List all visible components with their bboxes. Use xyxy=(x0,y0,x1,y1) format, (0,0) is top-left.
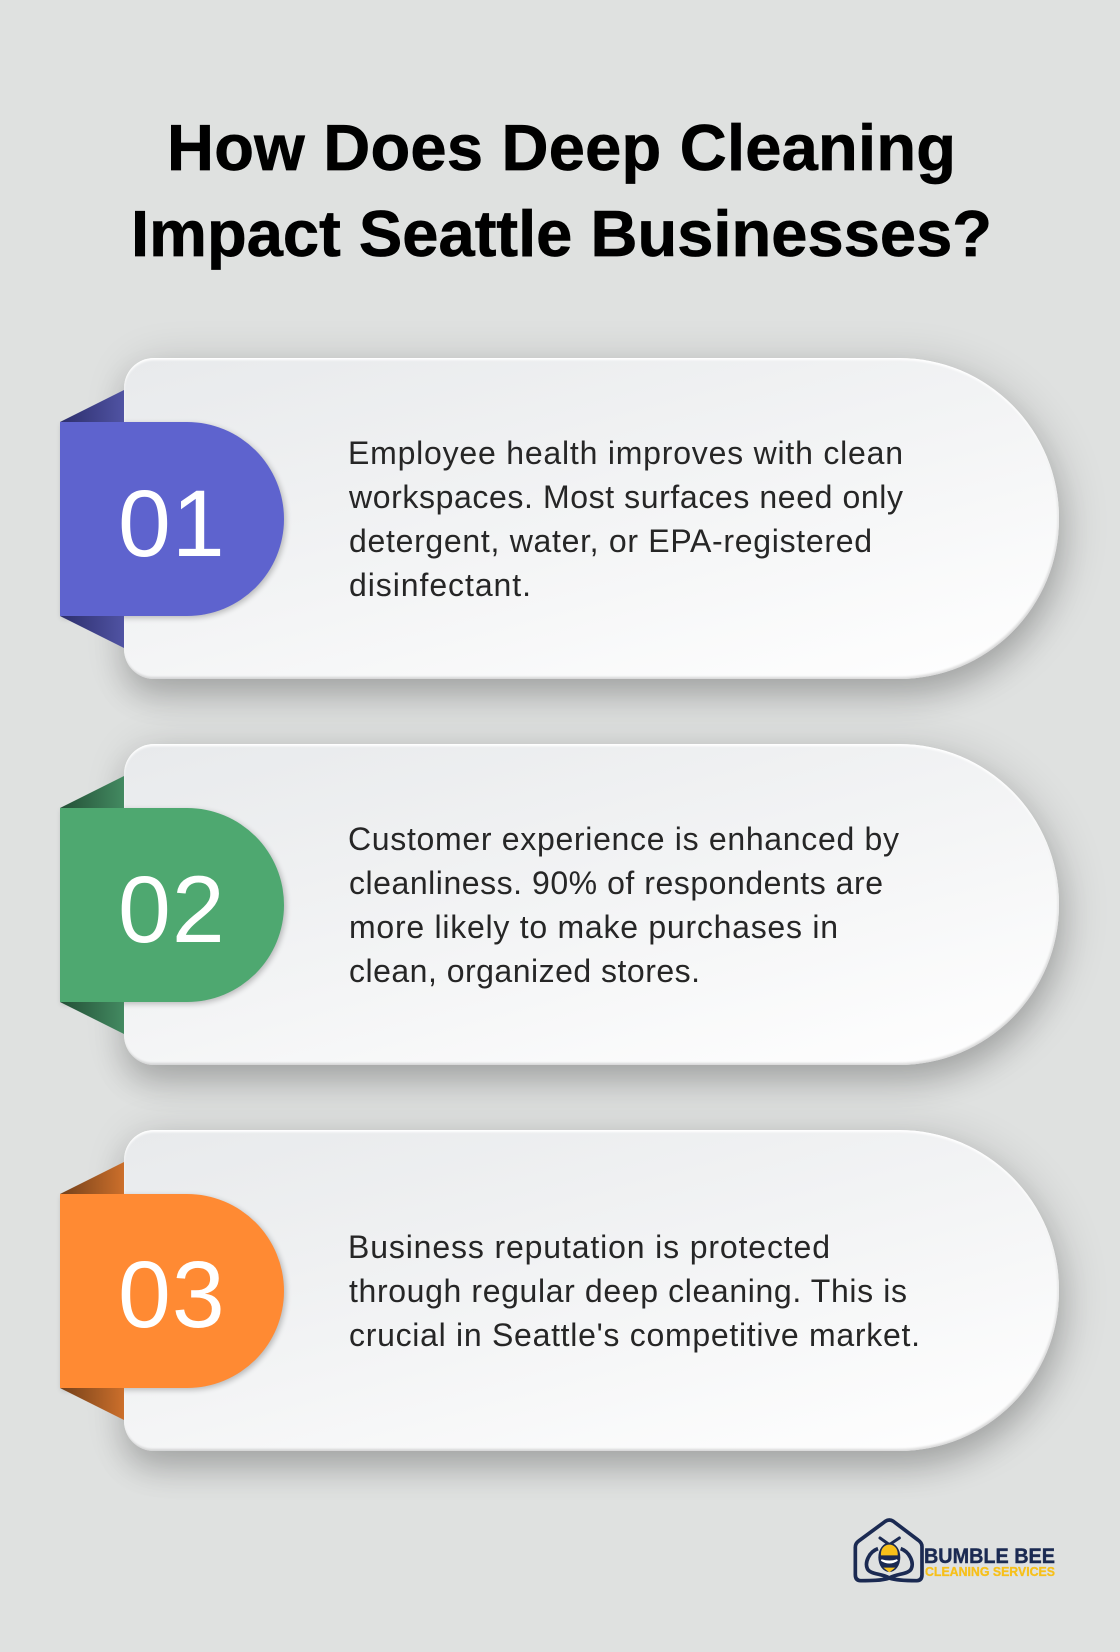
title xyxy=(131,111,992,270)
number badge 02 xyxy=(60,808,284,1002)
text: customer experience xyxy=(348,821,899,989)
icon: house with bee xyxy=(855,1520,922,1581)
card background xyxy=(124,744,1059,1065)
text: customer experience: clean, organized stores. xyxy=(349,953,700,989)
ribbon folds xyxy=(60,776,124,1034)
panel: step 01 employee health xyxy=(59,347,1084,714)
text: customer experience: Customer experience is enhanced by xyxy=(348,821,899,857)
number 02: 02 xyxy=(118,857,226,963)
text: business reputation xyxy=(348,1229,920,1353)
text: business reputation: Business reputation is protected xyxy=(348,1229,830,1265)
ribbon folds xyxy=(60,390,124,648)
text: customer experience: cleanliness. 90% of respondents are xyxy=(349,865,883,901)
card background xyxy=(124,358,1059,679)
number 03: 03 xyxy=(118,1242,226,1348)
number 01: 01 xyxy=(118,471,226,577)
panel: step 03 business reputation xyxy=(59,1119,1084,1486)
text: employee health: Employee health improves with clean xyxy=(348,435,903,471)
number badge 03 xyxy=(60,1194,284,1388)
title: Impact Seattle Businesses? xyxy=(131,197,992,270)
ribbon folds xyxy=(60,1162,124,1420)
text: customer experience: more likely to make purchases in xyxy=(349,909,838,945)
text: business reputation: crucial in Seattle's competitive market. xyxy=(349,1317,920,1353)
panel: step 02 customer experience xyxy=(59,733,1084,1100)
text: employee health xyxy=(348,435,903,603)
card background xyxy=(124,1130,1059,1451)
logo wordmark: CLEANING SERVICES xyxy=(925,1565,1055,1579)
title: How Does Deep Cleaning xyxy=(167,111,956,184)
number badge 01 xyxy=(60,422,284,616)
text: employee health: workspaces. Most surfaces need only xyxy=(348,479,903,515)
logo wordmark: BUMBLE BEE xyxy=(924,1544,1055,1568)
text: employee health: disinfectant. xyxy=(349,567,531,603)
text: employee health: detergent, water, or EPA-registered xyxy=(349,523,872,559)
logo wordmark xyxy=(924,1544,1055,1579)
logo: Bumble Bee Cleaning Services xyxy=(854,1518,1055,1582)
text: business reputation: through regular deep cleaning. This is xyxy=(349,1273,907,1309)
